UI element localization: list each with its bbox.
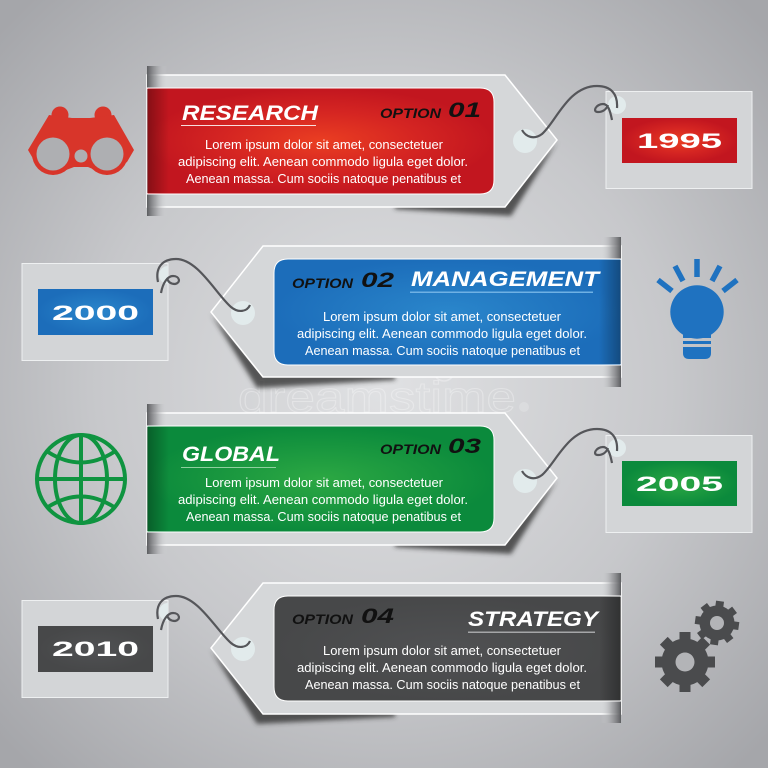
body text <box>297 644 587 692</box>
option number: 02 <box>361 269 394 292</box>
year tag 2000: 2000 <box>52 302 139 325</box>
body text: Lorem ipsum dolor sit amet, consectetuer <box>205 138 443 152</box>
body text: Lorem ipsum dolor sit amet, consectetuer <box>205 476 443 490</box>
watermark <box>238 361 529 422</box>
option number: 01 <box>448 99 481 122</box>
string 4 <box>157 596 250 647</box>
watermark: dreamstime <box>238 373 516 422</box>
year tag 2010 <box>22 600 168 698</box>
year tag 1995: 1995 <box>637 130 723 153</box>
icon: globe <box>37 435 125 523</box>
option label: OPTION <box>292 611 354 627</box>
body text <box>297 310 587 358</box>
fold shading <box>147 427 169 531</box>
option label: OPTION <box>380 441 442 457</box>
body text: Lorem ipsum dolor sit amet, consectetuer <box>323 310 561 324</box>
colour panel <box>147 426 494 532</box>
option label: OPTION <box>380 105 442 121</box>
fold shading <box>147 89 169 193</box>
year tag 2010: 2010 <box>52 638 139 661</box>
panel: research tag <box>147 66 557 216</box>
body text: Aenean massa. Cum sociis natoque penatibus et <box>186 172 462 186</box>
colour panel <box>274 259 621 365</box>
body text: adipiscing elit. Aenean commodo ligula eget dolor. <box>178 155 468 169</box>
heading: GLOBAL <box>182 443 280 466</box>
tag body <box>211 583 621 714</box>
body text: Aenean massa. Cum sociis natoque penatibus et <box>186 510 462 524</box>
tag shadow <box>395 142 557 216</box>
fold strip <box>601 573 621 723</box>
heading underline <box>181 125 316 126</box>
option number: 04 <box>361 605 394 628</box>
year tag 2005: 2005 <box>636 473 724 496</box>
fold strip <box>147 404 167 554</box>
tag shadow <box>211 650 395 724</box>
tag body <box>211 246 621 377</box>
fold shading <box>599 260 621 364</box>
body text: adipiscing elit. Aenean commodo ligula eget dolor. <box>178 493 468 507</box>
body text: adipiscing elit. Aenean commodo ligula eget dolor. <box>297 661 587 675</box>
body text: Lorem ipsum dolor sit amet, consectetuer <box>323 644 561 658</box>
heading: RESEARCH <box>182 102 319 125</box>
tag shadow <box>211 314 395 388</box>
heading underline <box>410 292 593 293</box>
year tag 1995 <box>606 92 752 188</box>
tag shadow <box>395 480 557 554</box>
heading: MANAGEMENT <box>411 268 602 291</box>
colour panel <box>274 596 621 701</box>
big gear <box>655 632 715 692</box>
body text: Aenean massa. Cum sociis natoque penatibus et <box>305 344 581 358</box>
tag hole <box>513 129 537 153</box>
option label: OPTION <box>292 275 354 291</box>
icon: light bulb <box>658 259 737 359</box>
tag body <box>147 413 557 545</box>
panel: management tag <box>211 237 621 388</box>
body text <box>178 138 468 186</box>
tag hole <box>231 301 255 325</box>
body text <box>178 476 468 524</box>
tag hole <box>231 637 255 661</box>
fold strip <box>601 237 621 387</box>
year tag 2000 <box>22 264 168 360</box>
tag body <box>147 75 557 207</box>
heading underline <box>181 467 276 468</box>
year tag 2005 <box>606 436 752 532</box>
icon: gears <box>655 601 739 692</box>
string 1 <box>522 86 617 137</box>
option number: 03 <box>448 435 481 458</box>
tag hole <box>513 469 537 493</box>
colour panel <box>147 88 494 194</box>
panel: strategy tag <box>211 573 621 724</box>
icon: binoculars <box>28 106 134 175</box>
body text: adipiscing elit. Aenean commodo ligula eget dolor. <box>297 327 587 341</box>
heading: STRATEGY <box>468 608 600 631</box>
heading underline <box>468 632 595 633</box>
string 3 <box>522 429 617 478</box>
fold strip <box>147 66 167 216</box>
string 2 <box>157 259 250 311</box>
fold shading <box>599 597 621 700</box>
small gear <box>695 601 739 645</box>
panel: global tag <box>147 404 557 554</box>
body text: Aenean massa. Cum sociis natoque penatibus et <box>305 678 581 692</box>
